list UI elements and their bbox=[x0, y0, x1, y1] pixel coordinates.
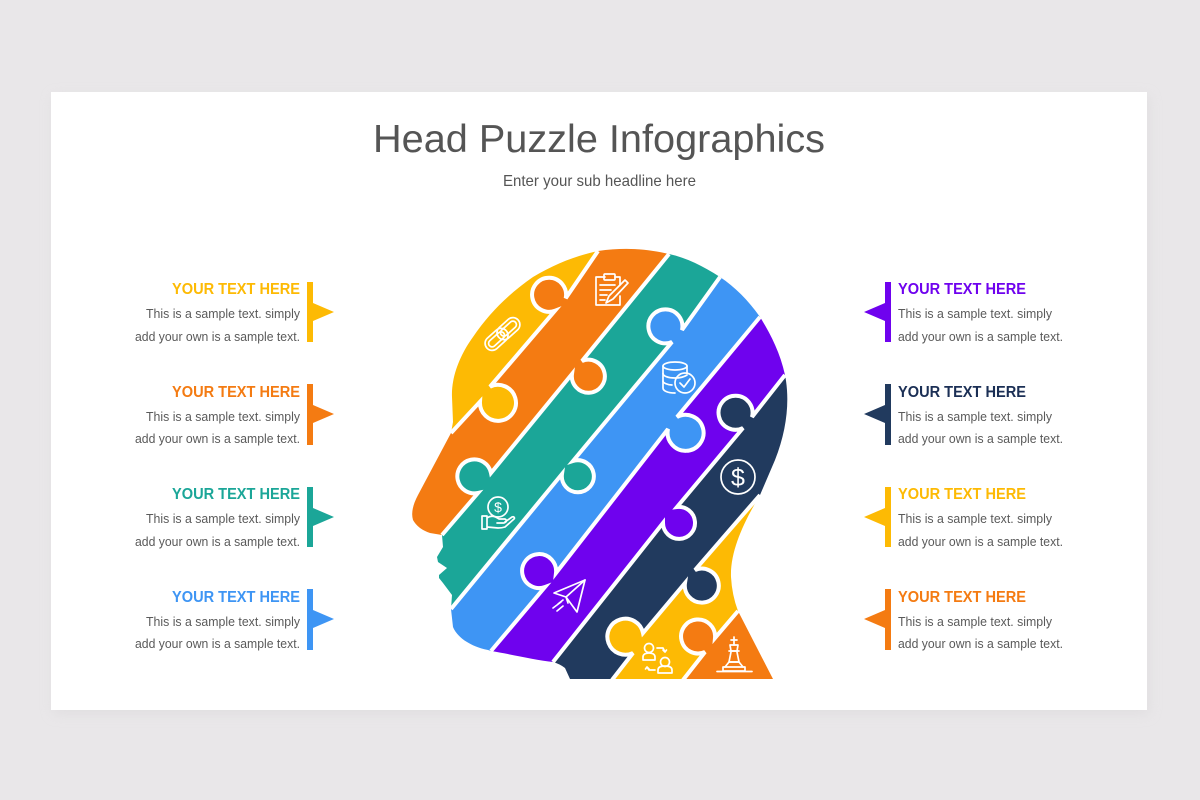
body text: add your own is a sample text. bbox=[135, 637, 300, 651]
body text: This is a sample text. simply bbox=[898, 410, 1053, 424]
body text: add your own is a sample text. bbox=[898, 432, 1063, 446]
icon: hand holding dollar bbox=[482, 497, 514, 529]
icon: hand holding dollar: $ bbox=[494, 499, 502, 515]
heading: YOUR TEXT HERE bbox=[172, 486, 300, 503]
head puzzle graphic bbox=[412, 249, 787, 680]
body text: This is a sample text. simply bbox=[898, 307, 1053, 321]
icon: chain link bbox=[482, 315, 523, 353]
icon: chess king bbox=[717, 637, 752, 672]
flag marker bbox=[864, 589, 891, 650]
puzzle piece: orange base bbox=[681, 611, 773, 679]
heading: YOUR TEXT HERE bbox=[898, 281, 1026, 298]
puzzle piece: yellow crown bbox=[451, 251, 598, 433]
body text: add your own is a sample text. bbox=[135, 432, 300, 446]
puzzle piece: yellow neck bbox=[607, 495, 760, 679]
flag marker bbox=[307, 384, 334, 445]
flag marker bbox=[864, 282, 891, 342]
puzzle piece: blue bbox=[451, 277, 760, 651]
icon: dollar coin bbox=[721, 460, 755, 494]
icon: dollar coin: $ bbox=[731, 464, 745, 492]
body text: This is a sample text. simply bbox=[146, 615, 301, 629]
body text: This is a sample text. simply bbox=[898, 615, 1053, 629]
right item 1: purple bbox=[864, 281, 1063, 344]
puzzle piece: navy bbox=[553, 375, 787, 679]
icon: paper plane bbox=[553, 580, 585, 612]
puzzle piece: orange forehead bbox=[412, 249, 669, 535]
icon: database with check bbox=[663, 362, 695, 393]
heading: YOUR TEXT HERE bbox=[172, 281, 300, 298]
icon: people exchange bbox=[643, 644, 672, 673]
body text: This is a sample text. simply bbox=[146, 307, 301, 321]
title: Head Puzzle Infographics bbox=[373, 118, 825, 161]
right item 4: orange bbox=[864, 589, 1063, 651]
body text: add your own is a sample text. bbox=[898, 637, 1063, 651]
left item 1: yellow bbox=[135, 281, 334, 344]
body text: add your own is a sample text. bbox=[135, 535, 300, 549]
body text: This is a sample text. simply bbox=[146, 512, 301, 526]
right item 3: yellow bbox=[864, 486, 1063, 549]
heading: YOUR TEXT HERE bbox=[172, 384, 300, 401]
body text: This is a sample text. simply bbox=[898, 512, 1053, 526]
flag marker bbox=[307, 487, 334, 547]
body text: This is a sample text. simply bbox=[146, 410, 301, 424]
flag marker bbox=[307, 282, 334, 342]
left item 2: orange bbox=[135, 384, 334, 446]
panel: white slide card bbox=[51, 92, 1147, 710]
left item 3: teal bbox=[135, 486, 334, 549]
flag marker bbox=[864, 487, 891, 547]
right item 2: navy bbox=[864, 384, 1063, 446]
heading: YOUR TEXT HERE bbox=[898, 589, 1026, 606]
heading: YOUR TEXT HERE bbox=[172, 589, 300, 606]
left item 4: blue bbox=[135, 589, 334, 651]
body text: add your own is a sample text. bbox=[135, 330, 300, 344]
flag marker bbox=[864, 384, 891, 445]
body text: add your own is a sample text. bbox=[898, 330, 1063, 344]
icon: document with pencil bbox=[596, 274, 628, 305]
heading: YOUR TEXT HERE bbox=[898, 384, 1026, 401]
heading: YOUR TEXT HERE bbox=[898, 486, 1026, 503]
puzzle piece: teal face bbox=[437, 254, 720, 609]
puzzle piece: purple bbox=[491, 317, 785, 662]
flag marker bbox=[307, 589, 334, 650]
body text: add your own is a sample text. bbox=[898, 535, 1063, 549]
subtitle: Enter your sub headline here bbox=[503, 173, 696, 190]
